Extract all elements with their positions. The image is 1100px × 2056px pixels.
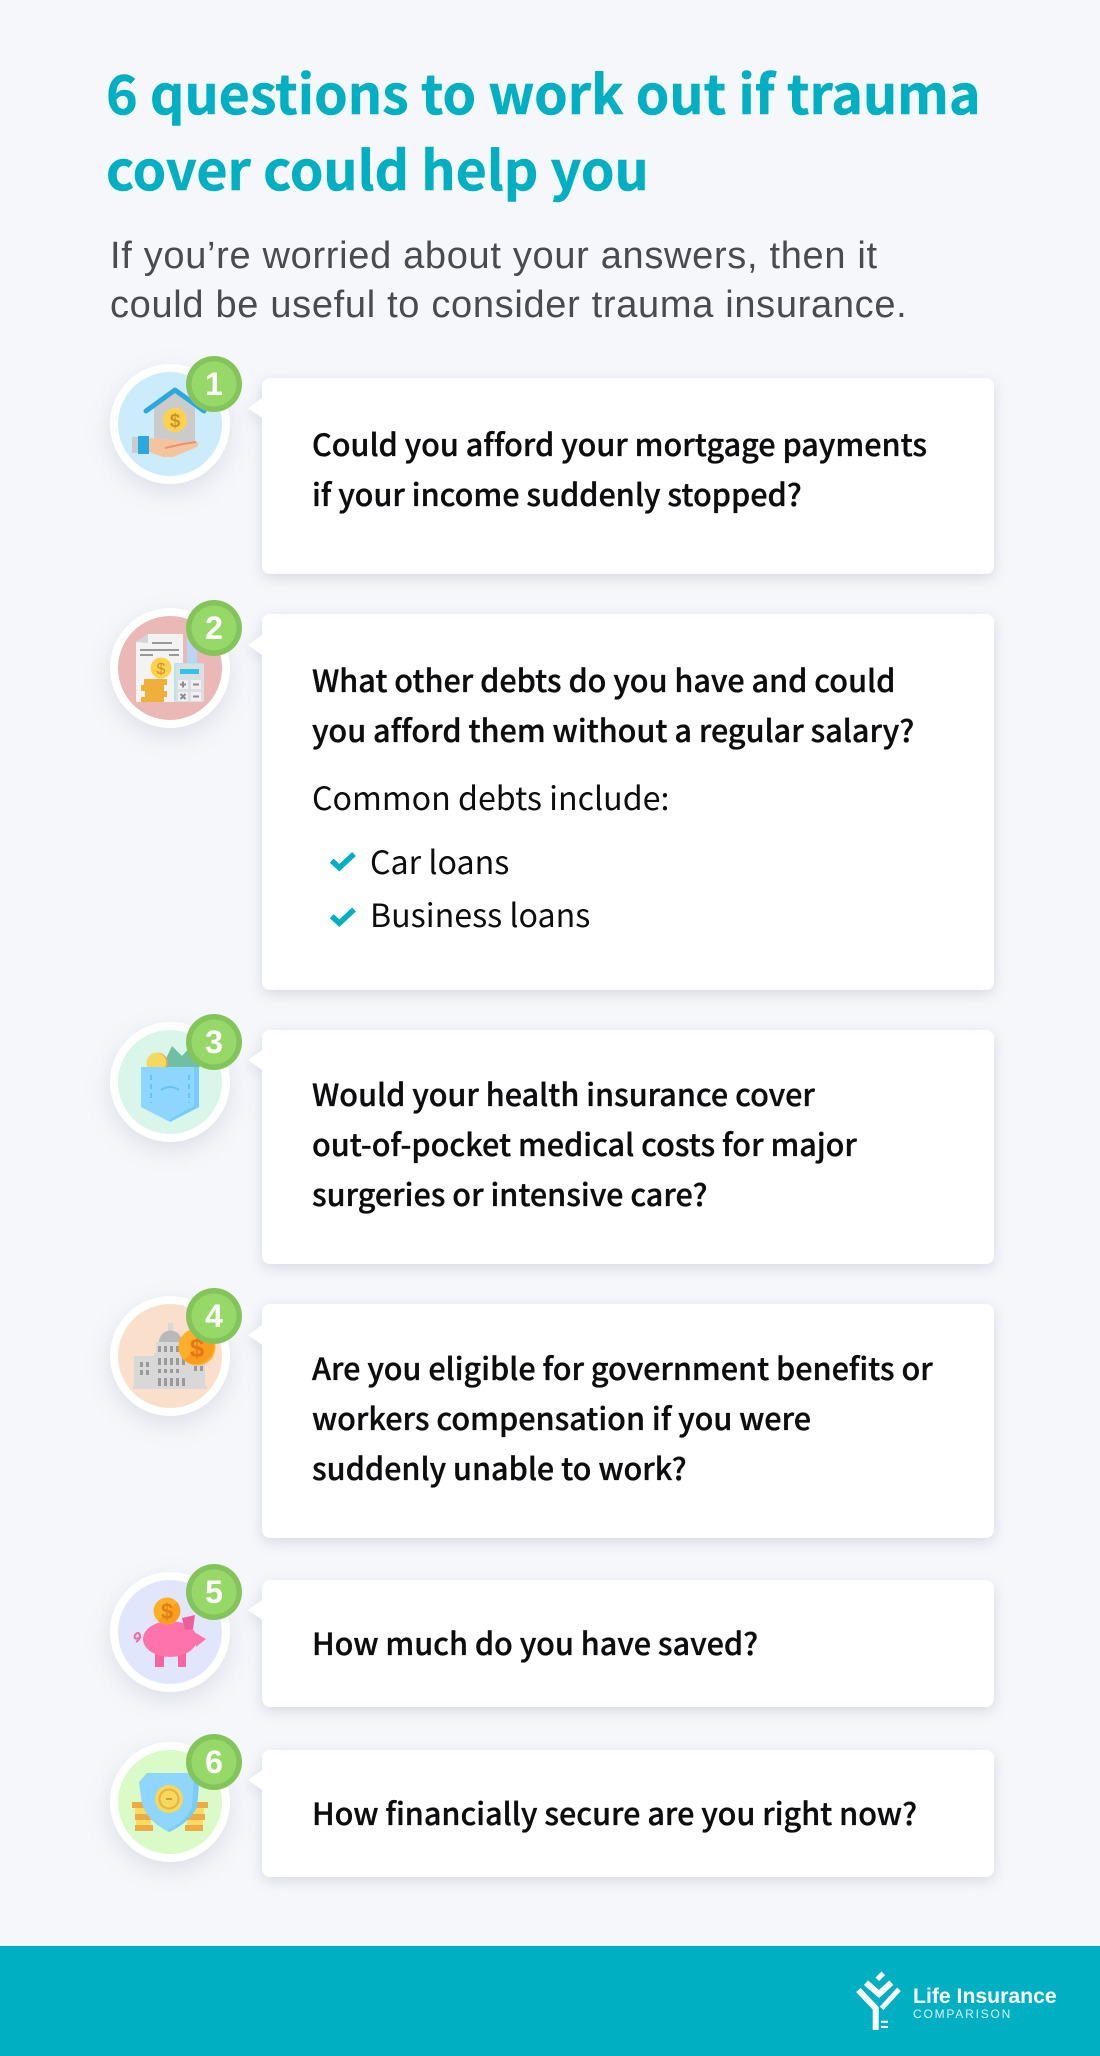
- icon: bills and calculator, badge 2: [110, 600, 242, 728]
- step 4 card: workers compensation if you were: [312, 1395, 811, 1439]
- logo: Life Insurance: [913, 1985, 1057, 2008]
- step 2 card: Business loans: [370, 891, 590, 937]
- icon: house in hand, badge 1: [110, 356, 242, 484]
- icon: shield and coins, badge 6: 6: [205, 1744, 223, 1780]
- subtitle: If you’re worried about your answers, then it: [110, 235, 878, 277]
- title: [106, 53, 981, 206]
- subtitle: could be useful to consider trauma insurance.: [110, 284, 907, 326]
- logo: COMPARISON: [913, 2007, 1012, 2021]
- step 1 card: Could you afford your mortgage payments: [312, 421, 927, 465]
- step 2 card: you afford them without a regular salary?: [312, 707, 914, 751]
- icon: piggy bank, badge 5: $: [161, 1599, 173, 1624]
- title: cover could help you: [106, 129, 649, 206]
- icon: bills and calculator, badge 2: $: [157, 661, 166, 678]
- step 5 card: How much do you have saved?: [312, 1620, 758, 1664]
- icon: government building and coin, badge 4: 4: [205, 1298, 223, 1334]
- icon: piggy bank, badge 5: [110, 1564, 242, 1692]
- step 3 card: [248, 1030, 994, 1264]
- icon: government building and coin, badge 4: $: [190, 1333, 205, 1363]
- icon: check: [332, 854, 354, 868]
- step 4 card: suddenly unable to work?: [312, 1445, 687, 1489]
- step 2 card: Common debts include:: [312, 774, 669, 820]
- step 5 card: [248, 1580, 994, 1707]
- icon: piggy bank, badge 5: 5: [205, 1574, 223, 1610]
- step 3 card: Would your health insurance cover: [312, 1071, 815, 1115]
- icon: house in hand, badge 1: $: [170, 411, 181, 432]
- icon: pocket with money, badge 3: [110, 1014, 242, 1142]
- subtitle: [110, 235, 907, 326]
- icon: house in hand, badge 1: 1: [205, 366, 223, 402]
- logo: [858, 1973, 1057, 2030]
- icon: pocket with money, badge 3: 3: [205, 1024, 223, 1060]
- step 4 card: Are you eligible for government benefits or: [312, 1345, 933, 1389]
- step 3 card: surgeries or intensive care?: [312, 1171, 708, 1215]
- step 3 card: out-of-pocket medical costs for major: [312, 1121, 857, 1165]
- icon: logo mark: [858, 1973, 899, 2030]
- icon: shield and coins, badge 6: [110, 1734, 242, 1862]
- step 2 card: [248, 614, 994, 990]
- step 6 card: How financially secure are you right now?: [312, 1790, 917, 1834]
- step 4 card: [248, 1304, 994, 1538]
- icon: government building and coin, badge 4: [110, 1288, 242, 1416]
- icon: bills and calculator, badge 2: 2: [205, 610, 223, 646]
- step 6 card: [248, 1750, 994, 1877]
- step 1 card: [248, 378, 994, 574]
- footer band: [0, 1946, 1100, 2056]
- step 1 card: if your income suddenly stopped?: [312, 471, 802, 515]
- title: 6 questions to work out if trauma: [106, 53, 981, 130]
- step 2 card: What other debts do you have and could: [312, 657, 895, 701]
- step 2 card: Car loans: [370, 838, 509, 884]
- icon: check: [332, 910, 354, 923]
